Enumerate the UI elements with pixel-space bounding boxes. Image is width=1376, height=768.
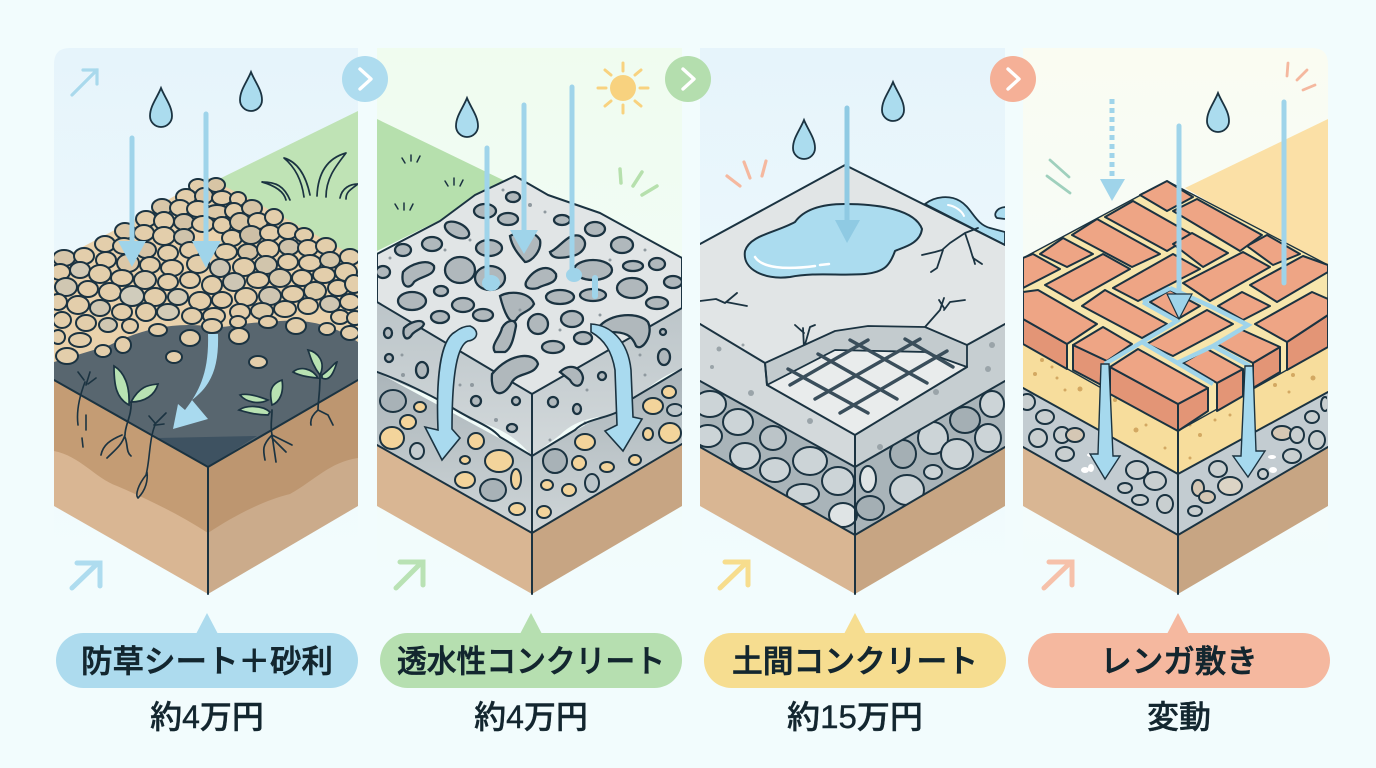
soil right face: [209, 458, 358, 594]
arrow: bottom left: [720, 562, 748, 588]
arrow: bottom left: [396, 562, 423, 588]
icon: grass tuft: [262, 153, 358, 200]
grass area: [215, 111, 358, 260]
price: 変動: 変動: [1147, 699, 1211, 735]
speckles: [710, 342, 995, 450]
puddle highlight: [755, 257, 829, 268]
earth layer: [700, 447, 855, 594]
soil left face: [54, 451, 207, 594]
label: 透水性コンクリート: [380, 613, 682, 688]
side water arrow left: [425, 326, 477, 460]
icon: seedlings and roots: [77, 350, 337, 498]
label: 土間コンクリート: 土間コンクリート: [732, 643, 978, 679]
gravel stones: [1019, 394, 1329, 516]
sand layer: [1023, 330, 1328, 474]
mortar base: [1023, 181, 1328, 431]
icon: water drop: [150, 88, 172, 127]
price: 約15万円: 約15万円: [787, 699, 923, 735]
stone layer: [700, 381, 1005, 535]
puddle: [745, 204, 922, 278]
sparkle dashes green: [1047, 160, 1070, 193]
arrow: top left: [72, 70, 97, 95]
rain arrow right: [192, 114, 221, 268]
earth layer: [1023, 447, 1178, 594]
arrow: bottom left: [1044, 562, 1072, 588]
sparkle dashes: [620, 169, 657, 195]
icon: water drop: [456, 98, 478, 137]
panel: 透水性コンクリート: [376, 48, 683, 594]
grass area: [377, 119, 505, 251]
yellow area: [1185, 119, 1328, 270]
chevron badge green: [665, 56, 711, 102]
panel background: [54, 48, 358, 218]
gravel stones: [380, 386, 683, 518]
icon: water drop: [1207, 93, 1229, 132]
overflow water: [925, 197, 1005, 245]
concrete top surface: [700, 165, 1005, 363]
sparkle dashes: [727, 161, 766, 186]
gravel layer: [377, 369, 682, 533]
side water arrow right: [591, 324, 642, 451]
speckles: [388, 188, 646, 442]
panel: 土間コンクリート: [694, 48, 1005, 594]
panel: 防草シート+砂利: [49, 48, 363, 594]
concrete left side: [700, 324, 855, 467]
rebar mesh: [788, 339, 953, 413]
water channels through joints: [1105, 288, 1250, 384]
chevron badge orange: [990, 56, 1036, 102]
brick sides: [1023, 315, 1328, 431]
rain arrow: [835, 108, 860, 243]
water arrow right: [1233, 366, 1265, 477]
concrete side layer: [377, 302, 682, 456]
chevron badge blue: [342, 56, 388, 102]
rain arrow left: [118, 138, 146, 267]
concrete right side: [855, 324, 1005, 467]
icon: water drop: [793, 120, 815, 159]
panel background: [700, 48, 1005, 224]
sparkle dashes orange: [1287, 63, 1315, 90]
label: 土間コンクリート: [704, 613, 1006, 688]
grass ticks: [395, 155, 463, 210]
pit floor: [767, 350, 967, 435]
label: レンガ敷き: [1028, 613, 1330, 688]
price: 約4万円: 約4万円: [150, 699, 264, 735]
cracks: [700, 228, 982, 348]
brick tops: [1023, 181, 1328, 404]
icon: water drop: [882, 82, 904, 121]
layer outlines: [1023, 388, 1328, 594]
label: レンガ敷き: レンガ敷き: [1100, 643, 1258, 679]
soil dark band: [54, 380, 208, 533]
price: 約4万円: 約4万円: [474, 699, 588, 735]
stones on top: [376, 192, 682, 432]
gravel base: [54, 177, 358, 362]
gravel layer: [1023, 388, 1328, 535]
dotted rain arrow: [1100, 99, 1125, 201]
pit walls: [765, 326, 967, 385]
curved water arrow: [173, 334, 218, 429]
label: 防草シート+砂利: 防草シート＋砂利: [81, 643, 333, 679]
panel background: [1023, 48, 1328, 578]
gravel stones: [49, 178, 363, 368]
water arrow left: [1090, 364, 1120, 479]
weed sheet: [54, 320, 358, 456]
white sparkle stones: [1081, 453, 1277, 473]
arrow: bottom left: [72, 563, 100, 588]
sand grains: [1033, 348, 1320, 460]
label: 防草シート+砂利: [56, 613, 358, 688]
icon: water drop: [240, 72, 262, 111]
main rain arrow: [1167, 126, 1192, 319]
concrete top surface: [377, 176, 682, 394]
icon: sun: [598, 63, 648, 113]
panel background: [377, 48, 682, 256]
rain arrows: [482, 87, 595, 296]
sheet fold: [158, 436, 257, 467]
cobble stones: [694, 391, 1004, 527]
outlines: [700, 165, 1005, 594]
label: 透水性コンクリート: 透水性コンクリート: [397, 643, 665, 679]
right rain line: [1282, 102, 1286, 283]
panel: レンガ敷き: [1019, 48, 1329, 594]
layer boundary lines: [377, 394, 682, 594]
earth layer: [377, 445, 532, 594]
